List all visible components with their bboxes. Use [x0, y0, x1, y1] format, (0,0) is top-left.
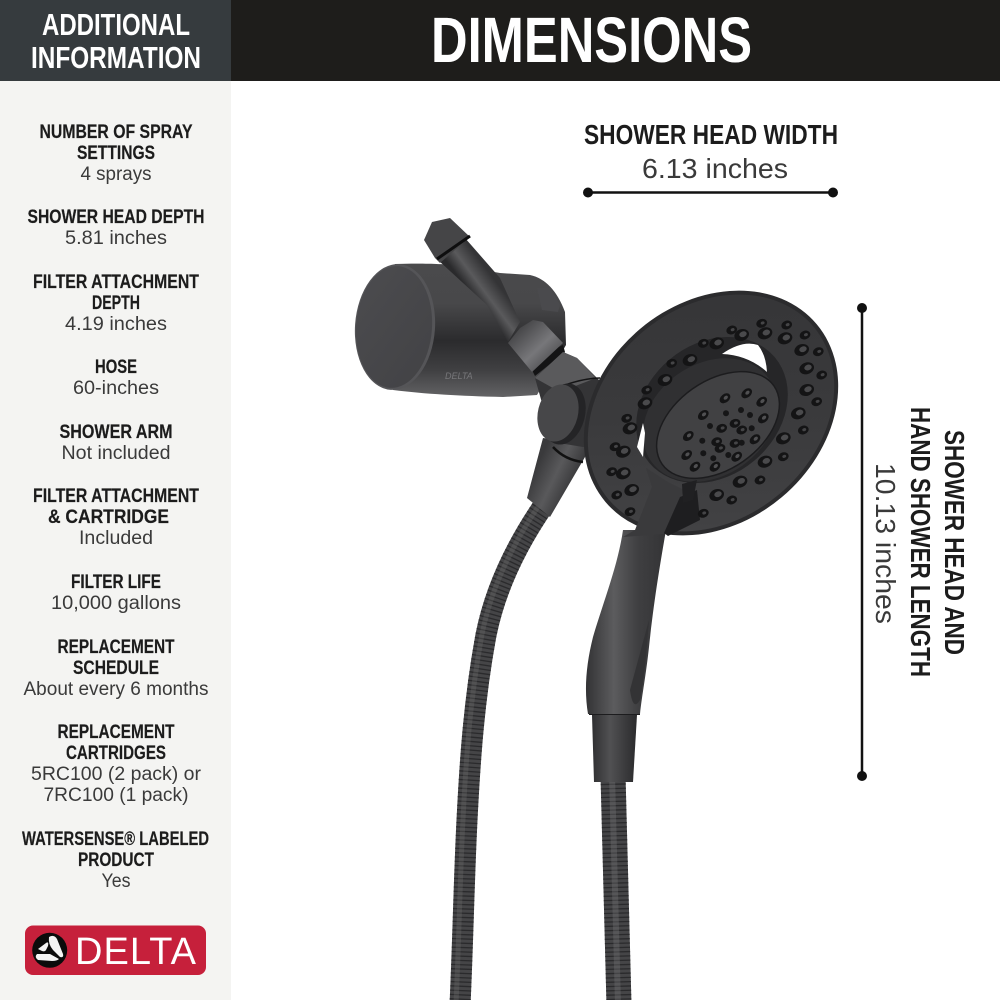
- header: dimensions title: [231, 0, 1000, 81]
- mount neck: [527, 438, 592, 517]
- delta logo: DELTA: [75, 931, 197, 973]
- spec: shower arm: SHOWER ARM: [60, 421, 172, 443]
- filter housing: DELTA: [445, 371, 473, 381]
- spec: replacement schedule: About every 6 months: [24, 679, 208, 700]
- spec: filter attachment and cartridge: & CARTRIDGE: [48, 506, 169, 528]
- spray nozzles on inner head: [679, 386, 771, 474]
- product illustration: shower head with filter: [351, 218, 887, 1000]
- dimension: shower head and hand shower length: HAND SHOWER LENGTH: [905, 407, 936, 677]
- dimension: shower head width: SHOWER HEAD WIDTH: [584, 119, 838, 150]
- spec: replacement schedule: [24, 636, 208, 700]
- spec: filter attachment depth: FILTER ATTACHMENT: [33, 271, 199, 293]
- filter housing: [351, 261, 566, 397]
- handle neck and lever: [623, 468, 700, 537]
- spec: number of spray settings: 4 sprays: [80, 164, 152, 185]
- spec: filter attachment depth: [33, 271, 199, 335]
- dimension: shower head width: [583, 119, 838, 198]
- spec: shower arm: Not included: [62, 443, 170, 464]
- shower arm with nut and fitting: [424, 218, 565, 376]
- dimension: shower head and hand shower length: [857, 303, 970, 781]
- spec: filter attachment and cartridge: [33, 485, 199, 549]
- spec: replacement schedule: REPLACEMENT: [58, 636, 175, 658]
- spec: shower head depth: [28, 206, 204, 249]
- spec: replacement schedule: SCHEDULE: [73, 657, 159, 679]
- spec: shower arm: [60, 421, 172, 464]
- hose to hand shower: [612, 775, 619, 1000]
- header: additional information: [0, 0, 231, 81]
- spec: replacement cartridges: 7RC100 (1 pack): [44, 785, 188, 806]
- header: additional information: INFORMATION: [31, 40, 201, 75]
- spec list: [22, 121, 209, 892]
- spec: replacement cartridges: REPLACEMENT: [58, 721, 175, 743]
- spec: filter life: 10,000 gallons: [51, 593, 181, 614]
- dimension: shower head and hand shower length: 10.13 inches: [870, 463, 901, 624]
- spec: number of spray settings: [40, 121, 192, 185]
- spec: filter life: FILTER LIFE: [71, 571, 161, 593]
- dimension: shower head width: 6.13 inches: [642, 153, 788, 184]
- spec: shower head depth: SHOWER HEAD DEPTH: [28, 206, 204, 228]
- spec: filter life: [51, 571, 181, 614]
- spec: replacement cartridges: [31, 721, 202, 806]
- outer spray ring: [535, 240, 887, 586]
- spec: watersense labeled product: WATERSENSE® LABELED: [22, 828, 209, 850]
- ring inner opening: [607, 307, 817, 513]
- spec: hose: [73, 356, 159, 399]
- spec: watersense labeled product: Yes: [102, 871, 130, 892]
- hand shower handle: [586, 530, 666, 782]
- swivel mount: [532, 352, 625, 462]
- hose to wall mount: [456, 501, 546, 1000]
- dimension: shower head and hand shower length: SHOWER HEAD AND: [939, 430, 970, 655]
- spray nozzles on ring: [605, 317, 828, 519]
- delta logo: [25, 926, 206, 975]
- spec: watersense labeled product: [22, 828, 209, 892]
- spec: number of spray settings: NUMBER OF SPRAY: [40, 121, 192, 143]
- spec: replacement cartridges: 5RC100 (2 pack) or: [31, 764, 202, 785]
- header: additional information: ADDITIONAL: [42, 7, 190, 42]
- spec: filter attachment and cartridge: Included: [79, 528, 153, 549]
- spec: filter attachment and cartridge: FILTER ATTACHMENT: [33, 485, 199, 507]
- spec: shower head depth: 5.81 inches: [65, 228, 167, 249]
- side panel background: [0, 81, 231, 1000]
- spec: replacement cartridges: CARTRIDGES: [66, 742, 166, 764]
- spec: number of spray settings: SETTINGS: [77, 142, 155, 164]
- header: dimensions title: DIMENSIONS: [431, 4, 752, 76]
- spec: hose: HOSE: [95, 356, 137, 378]
- spec: filter attachment depth: 4.19 inches: [65, 314, 167, 335]
- spec: watersense labeled product: PRODUCT: [78, 849, 154, 871]
- inner spray head: [619, 333, 801, 507]
- spec: filter attachment depth: DEPTH: [92, 292, 140, 314]
- spec: hose: 60-inches: [73, 378, 159, 399]
